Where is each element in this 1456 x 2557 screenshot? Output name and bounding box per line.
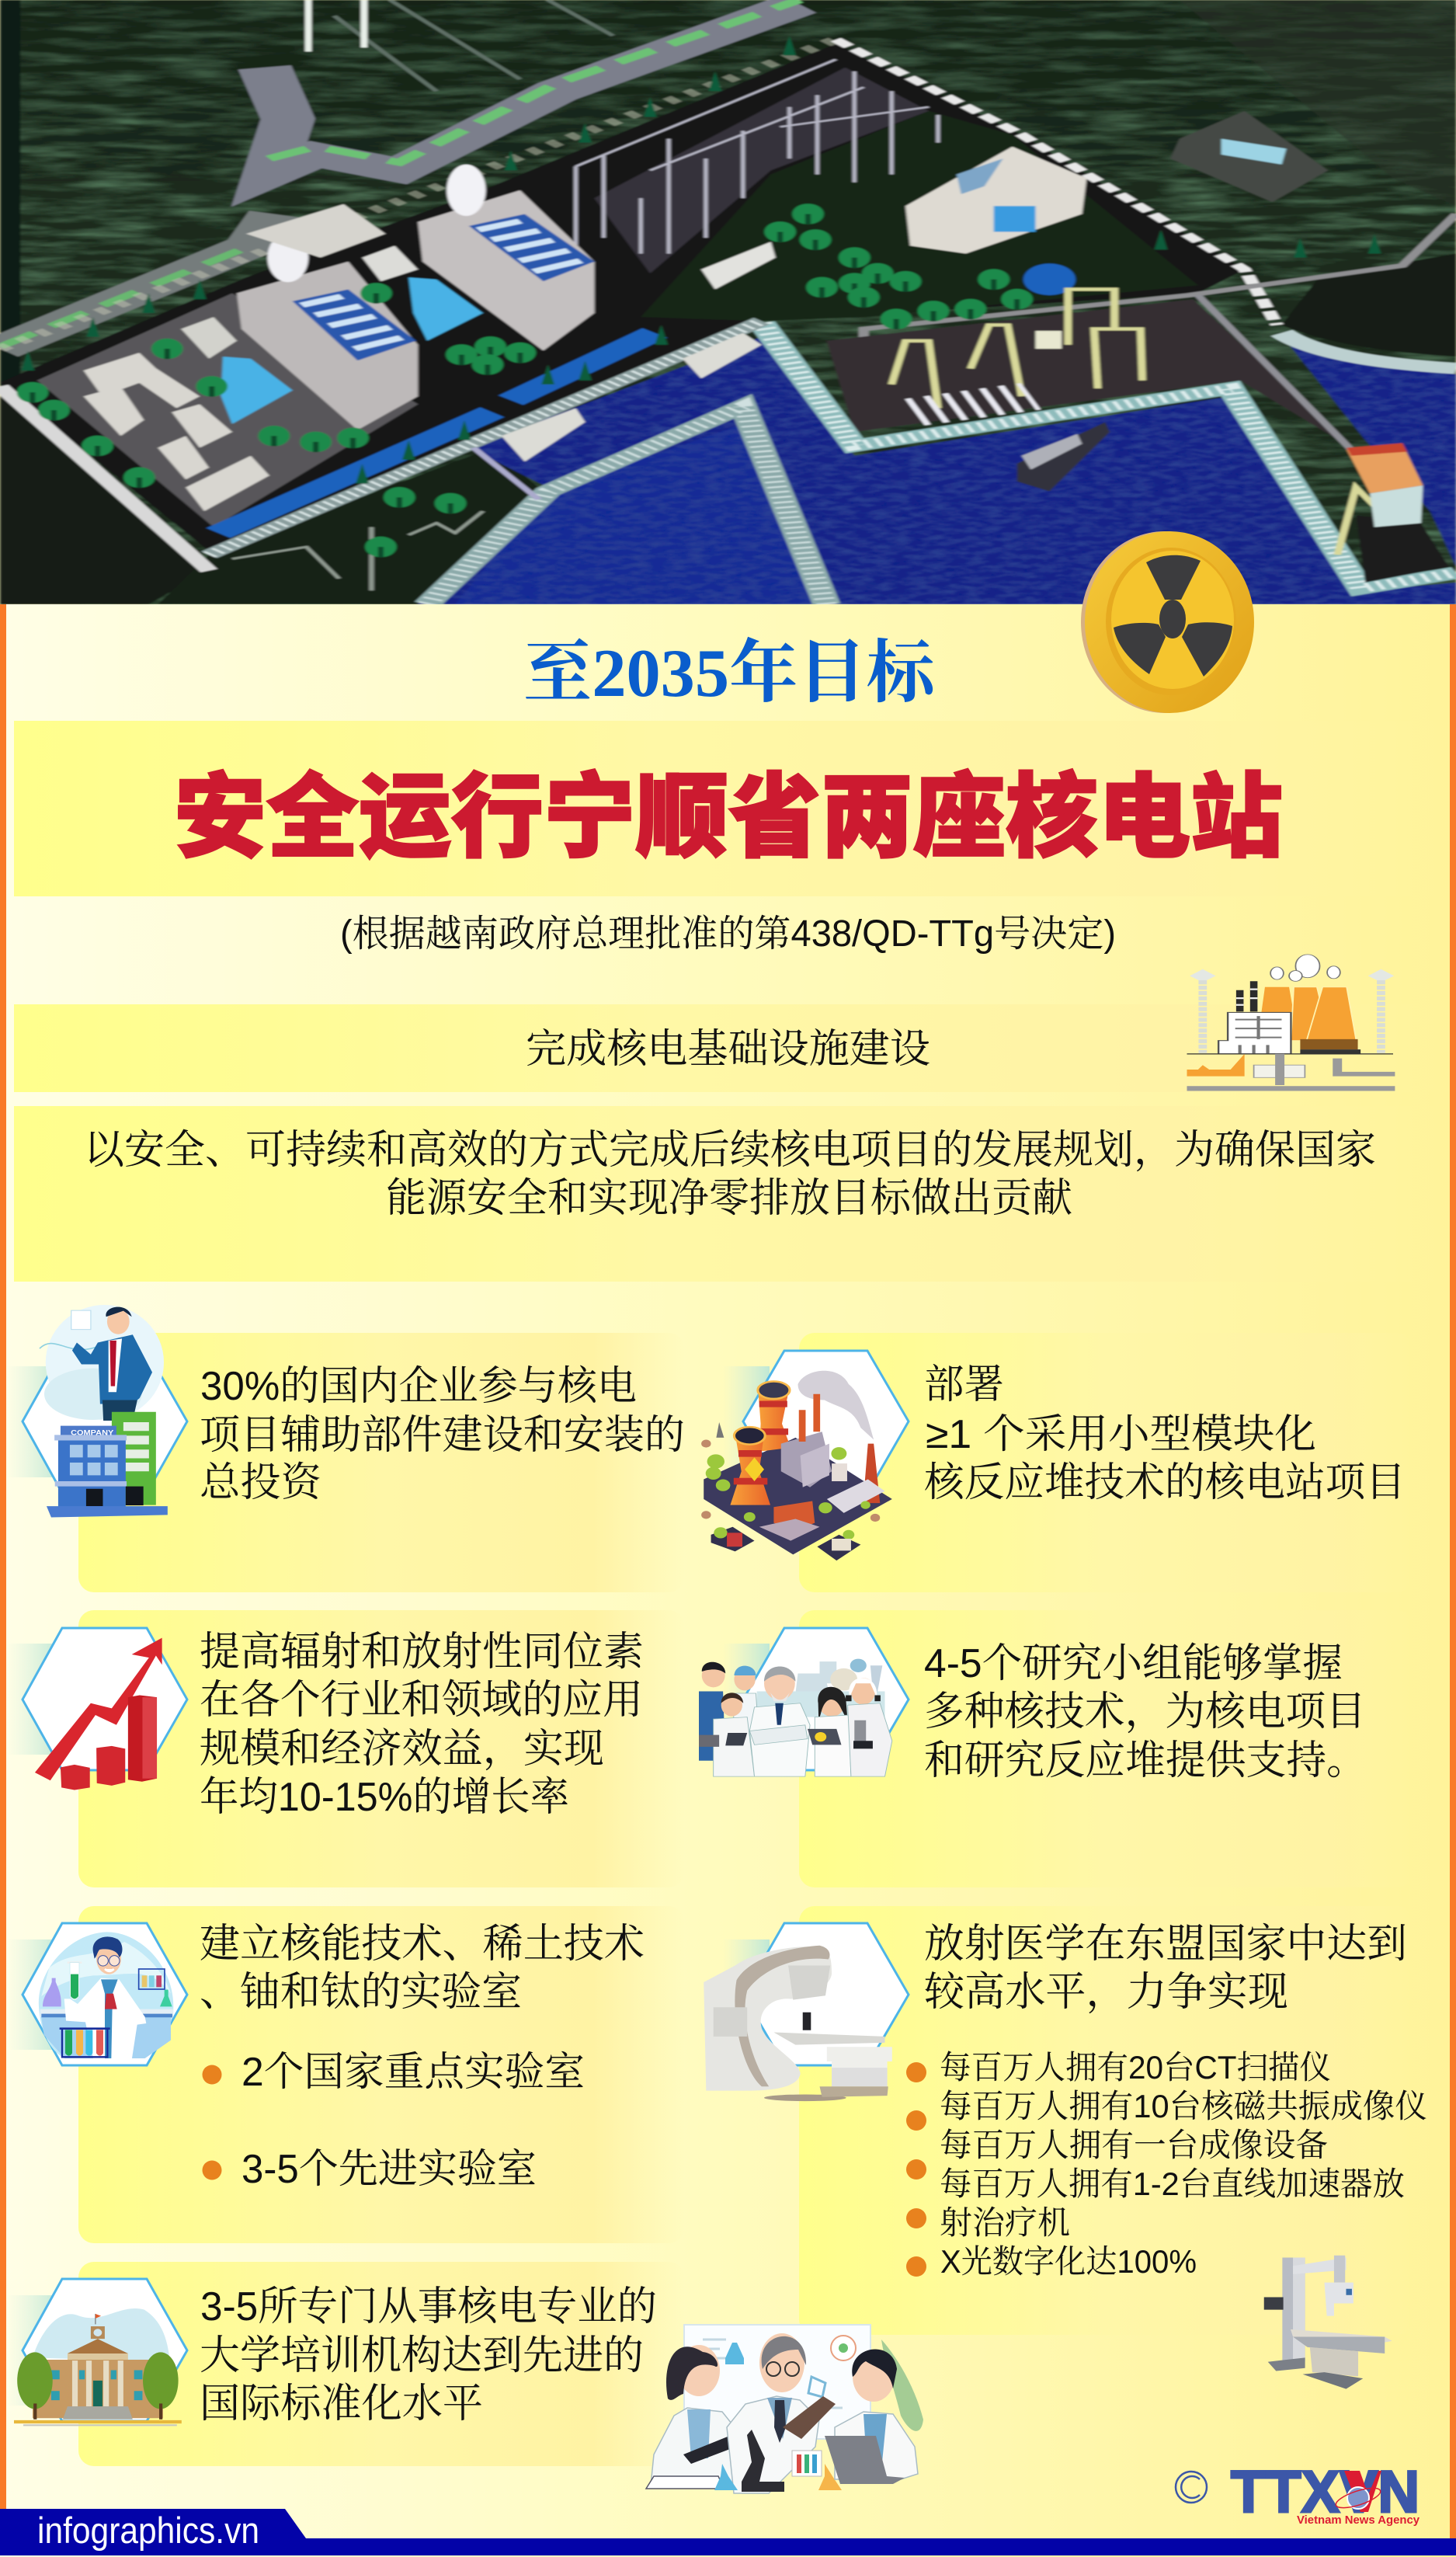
- text: laboratories: 、铀和钛的实验室: [200, 1959, 522, 2017]
- trees: [17, 382, 48, 402]
- panel: universities: [6, 2262, 684, 2466]
- text: radiation medicine: 放射医学在东盟国家中达到: [924, 1911, 1407, 1969]
- panel: laboratories: [6, 1906, 684, 2243]
- panel: radiation medicine: [704, 1906, 1427, 2335]
- text: universities: 国际标准化水平: [200, 2371, 483, 2429]
- harbour house: [1356, 515, 1449, 583]
- icon: team of nuclear researchers: [699, 1659, 892, 1776]
- center man: [727, 2396, 819, 2493]
- text: universities: 3-5所专门从事核电专业的: [200, 2273, 657, 2332]
- list: radiation medicine targets: [906, 2042, 1427, 2283]
- illustration: team of scientists with microscope: [646, 2325, 923, 2493]
- text: radiation applications growth: [200, 1619, 644, 1822]
- text: domestic enterprises: 项目辅助部件建设和安装的: [200, 1402, 685, 1460]
- text: domestic enterprises: 总投资: [200, 1449, 322, 1508]
- text: radiation applications growth: 规模和经济效益，实现: [200, 1716, 604, 1774]
- right man: [835, 2412, 918, 2479]
- title: to 2035: 至2035年目标: [523, 636, 940, 711]
- leaves: [881, 2340, 923, 2431]
- text: small modular reactor: [924, 1352, 1406, 1508]
- icon: businessman and company building: COMPANY: [71, 1429, 114, 1437]
- icon: university building: [14, 2308, 182, 2426]
- list: radiation medicine targets: 每百万人拥有1-2台直线加速器放: [940, 2159, 1405, 2205]
- text: small modular reactor: 部署: [924, 1352, 1004, 1410]
- microscope: [742, 2430, 784, 2492]
- logo: TTXVN Vietnam News Agency: TTXVN: [1231, 2459, 1420, 2525]
- text: research groups: [924, 1630, 1367, 1786]
- text: research groups: 和研究反应堆提供支持。: [924, 1727, 1367, 1786]
- list: radiation medicine targets: 每百万人拥有20台CT扫描仪: [940, 2042, 1331, 2089]
- text: complete infrastructure: 完成核电基础设施建设: [526, 1016, 930, 1074]
- list: radiation medicine targets: X光数字化达100%: [940, 2236, 1197, 2283]
- text: laboratories: 2个国家重点实验室: [242, 2039, 585, 2097]
- description text: [84, 1117, 1376, 1223]
- subtitle text band 2: [14, 1004, 1450, 1092]
- icon: x-ray machine: [1264, 2256, 1392, 2389]
- text: radiation applications growth: 在各个行业和领域的应用: [200, 1667, 643, 1725]
- text: domestic enterprises: 30%的国内企业参与核电: [200, 1353, 637, 1411]
- text: radiation medicine: 较高水平，力争实现: [924, 1959, 1288, 2017]
- text: radiation medicine: [924, 1911, 1407, 2017]
- panel: domestic enterprises: [6, 1305, 685, 1592]
- icon: businessman and company building: [40, 1305, 168, 1517]
- left woman: [651, 2408, 745, 2486]
- text: domestic enterprises: [200, 1353, 685, 1508]
- panel: research groups: [699, 1610, 1413, 1887]
- logo: TTXVN Vietnam News Agency: Vietnam News Agency: [1297, 2514, 1420, 2527]
- panel: small modular reactor: [701, 1333, 1413, 1592]
- panel: radiation applications growth: [6, 1610, 684, 1887]
- icon: linear accelerator machine: [704, 1946, 892, 2101]
- text: small modular reactor: ≥1 个采用小型模块化: [926, 1401, 1316, 1459]
- text: small modular reactor: 核反应堆技术的核电站项目: [924, 1449, 1406, 1508]
- page background: [0, 604, 1456, 2557]
- text: laboratories: 建立核能技术、稀土技术: [200, 1911, 645, 1969]
- text: laboratories: 3-5个先进实验室: [242, 2136, 537, 2194]
- footer bar with website tab: infographics.vn: [37, 2510, 259, 2551]
- reactor buildings: [237, 262, 418, 430]
- icon: red growth arrow chart: [35, 1638, 162, 1790]
- subtitle: decision reference: (根据越南政府总理批准的第438/QD-TTg号决定): [340, 903, 1116, 957]
- title: main red heading: 安全运行宁顺省两座核电站: [174, 743, 1283, 875]
- text: universities: [200, 2273, 657, 2429]
- icon: power plant with cooling towers: [1187, 955, 1395, 1091]
- text: radiation applications growth: 提高辐射和放射性同位素: [200, 1619, 644, 1677]
- text: research groups: 4-5个研究小组能够掌握: [924, 1630, 1343, 1689]
- photo: nuclear power plant aerial rendering: [0, 0, 1456, 604]
- text: universities: 大学培训机构达到先进的: [200, 2322, 644, 2381]
- description text: 以安全、可持续和高效的方式完成后续核电项目的发展规划，为确保国家: [84, 1117, 1376, 1175]
- list: radiation medicine targets: 每百万人拥有一台成像设备: [940, 2120, 1328, 2166]
- orange side borders: [0, 604, 1456, 2538]
- icon: scientist with test tubes: [39, 1932, 173, 2058]
- administration building: [905, 147, 1086, 254]
- footer bar with website tab: [0, 2509, 1456, 2555]
- list: radiation medicine targets: 每百万人拥有10台核磁共振成像仪: [940, 2081, 1427, 2127]
- description text: 能源安全和实现净零排放目标做出贡献: [386, 1165, 1072, 1223]
- description band: [14, 1106, 1450, 1282]
- text: laboratories: [200, 1911, 645, 2194]
- sea: [418, 337, 1456, 604]
- port gantry cranes: [891, 289, 1384, 558]
- list: radiation medicine targets: 射治疗机: [940, 2197, 1070, 2244]
- icon: isometric nuclear plant: [701, 1371, 892, 1560]
- ship: [1017, 422, 1110, 492]
- icon: radiation coin: [1081, 531, 1254, 713]
- text: radiation applications growth: 年均10-15%的增长率: [200, 1764, 569, 1822]
- auxiliary buildings: [84, 353, 269, 511]
- text: research groups: 多种核技术，为核电项目: [924, 1679, 1366, 1737]
- heading band: [14, 721, 1450, 896]
